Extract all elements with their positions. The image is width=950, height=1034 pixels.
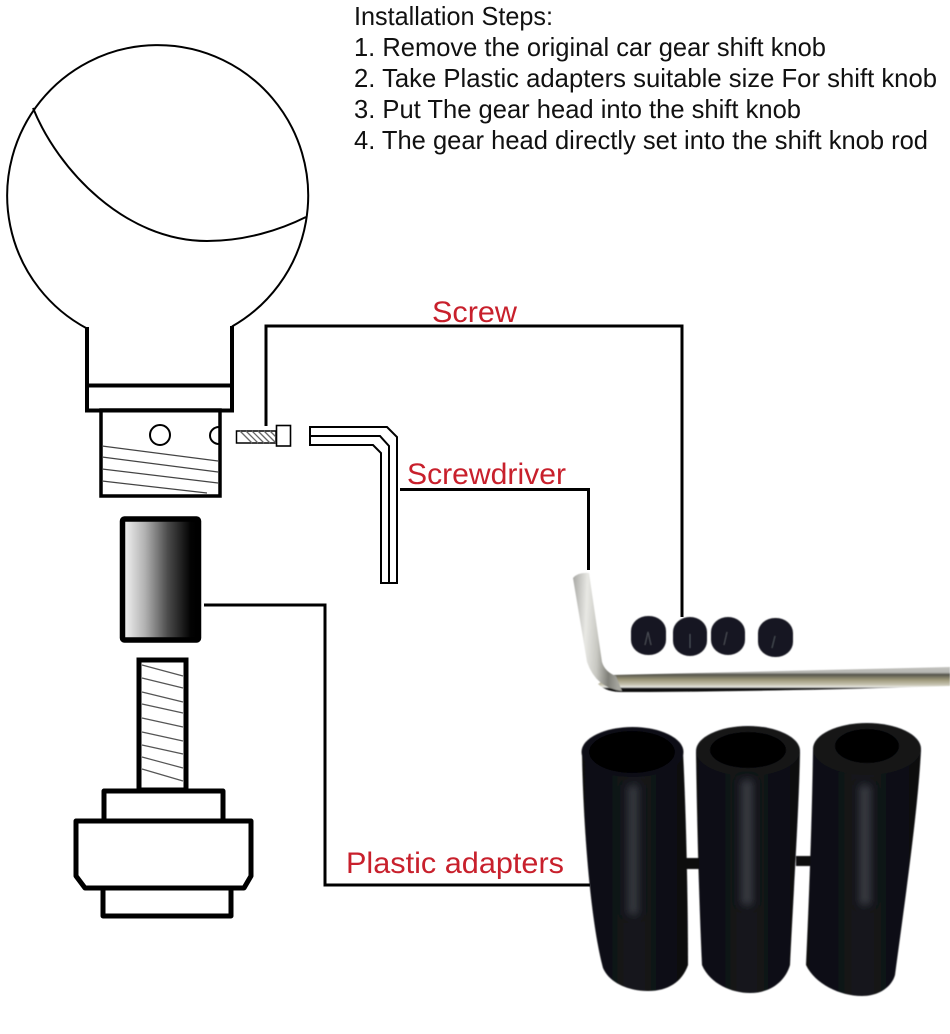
- label: Screw: Screw: [432, 296, 517, 329]
- label: Plastic adapters: Plastic adapters: [346, 847, 564, 880]
- threaded socket: [101, 410, 220, 496]
- photo: set screws: [631, 616, 793, 657]
- diagram: shift knob assembly: [7, 45, 682, 916]
- stud base: [76, 791, 251, 916]
- adapter cylinder right: [806, 723, 921, 996]
- plastic adapter diagram: [122, 519, 198, 640]
- installation steps text: [354, 1, 937, 155]
- leader line: screwdriver: [400, 490, 588, 570]
- small screw diagram: [236, 426, 290, 446]
- leader line: screw: [266, 326, 682, 617]
- adapter cylinder left: [582, 727, 688, 991]
- adapter cylinder middle: [696, 726, 800, 993]
- label: Screwdriver: Screwdriver: [407, 458, 566, 491]
- connector rods: [685, 856, 812, 869]
- installation steps text: 3. Put The gear head into the shift knob: [354, 94, 801, 124]
- leader line: plastic adapters: [204, 605, 590, 885]
- knob ball with neck: [7, 45, 308, 385]
- knob collar: [87, 386, 232, 410]
- threaded stud: [139, 660, 186, 790]
- installation steps text: Installation Steps:: [354, 1, 553, 31]
- installation steps text: 2. Take Plastic adapters suitable size For shift knob: [354, 63, 937, 93]
- installation steps text: 4. The gear head directly set into the shift knob rod: [354, 125, 928, 155]
- photo: plastic adapters: [582, 723, 921, 996]
- hex wrench diagram: [310, 427, 397, 583]
- installation steps text: 1. Remove the original car gear shift knob: [354, 32, 826, 62]
- photo: hex key: [573, 573, 950, 692]
